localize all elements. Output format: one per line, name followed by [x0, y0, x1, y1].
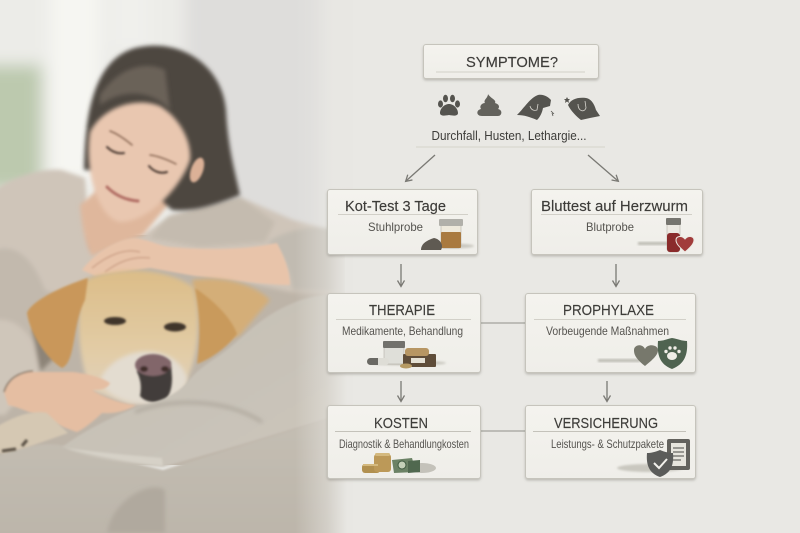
panel: Bluttest [532, 190, 702, 254]
heading: Bluttest: Bluttest auf Herzwurm [541, 198, 688, 215]
heading: Versicherung: VERSICHERUNG [554, 415, 658, 432]
heading: Prophylaxe: PROPHYLAXE [563, 302, 654, 319]
icon: blood tube and heart [638, 218, 694, 252]
icon: heart and paw shield [598, 338, 687, 369]
dog eyes [104, 317, 186, 332]
photo base tone [0, 235, 345, 465]
connector: Therapie to Prophylaxe [481, 322, 525, 324]
heading: symptome: SYMPTOME? [466, 54, 558, 71]
dog right ear [195, 288, 237, 364]
text: Vorbeugende: Vorbeugende Maßnahmen [546, 324, 669, 338]
eyes and mouth [107, 131, 176, 201]
dog body [192, 279, 270, 350]
arrow: Therapie to Kosten [400, 381, 402, 401]
icon: coins and banknotes [362, 453, 436, 473]
icon: coughing dog [517, 95, 554, 120]
panel: Kot-Test [328, 190, 478, 254]
ear of woman [187, 156, 207, 184]
text: Leistungs: Leistungs- & Schutzpakete [551, 437, 664, 451]
paw [0, 412, 68, 453]
icon: clipboard and shield [617, 439, 690, 477]
arrow: symptoms to Bluttest [588, 155, 618, 181]
heading: Therapie: THERAPIE [369, 302, 435, 319]
hand holding the dog [4, 371, 136, 432]
text: Blutprobe: Blutprobe [586, 220, 634, 234]
dog head [79, 271, 198, 405]
hair highlight [100, 66, 170, 110]
icon: medicine [367, 341, 446, 368]
icon: lethargic dog [564, 97, 600, 120]
heading: Kot-Test: Kot-Test 3 Tage [345, 198, 446, 215]
panel: Prophylaxe [526, 294, 696, 372]
photo: woman with sick dog on a sofa [0, 0, 353, 533]
icon: paw [438, 95, 460, 116]
window and curtains [0, 0, 325, 240]
sweater [0, 170, 340, 415]
pillow [62, 295, 350, 467]
connector: Kosten to Versicherung [481, 430, 525, 432]
icon: stool [477, 94, 501, 116]
panel: Kosten [328, 406, 480, 478]
panel: Therapie [328, 294, 480, 372]
text: Medikamente: Medikamente, Behandlung [342, 324, 463, 338]
icon: stool sample jar [421, 219, 474, 250]
arrow: Prophylaxe to Versicherung [606, 381, 608, 401]
nose and mouth [135, 354, 172, 402]
text: Diagnostik: Diagnostik & Behandlungkosten [339, 437, 469, 451]
right fade of photo [295, 0, 353, 533]
dog left ear [27, 278, 88, 368]
face [89, 102, 190, 222]
arrow: Bluttest to Prophylaxe [615, 264, 617, 286]
sofa [0, 418, 350, 533]
panel: symptome [416, 44, 605, 147]
muzzle [100, 352, 187, 405]
text: Stuhlprobe: Stuhlprobe [368, 220, 423, 234]
heading: Kosten: KOSTEN [374, 415, 428, 432]
neck [80, 175, 172, 256]
arrow: Kot-Test to Therapie [400, 264, 402, 286]
text: symptome list: Durchfall, Husten, Lethargie... [432, 128, 586, 143]
arrow: symptoms to Kot-Test [406, 155, 435, 181]
arm and hand on dog's head [82, 238, 290, 285]
hair back [84, 46, 240, 210]
panel: Versicherung [526, 406, 696, 478]
